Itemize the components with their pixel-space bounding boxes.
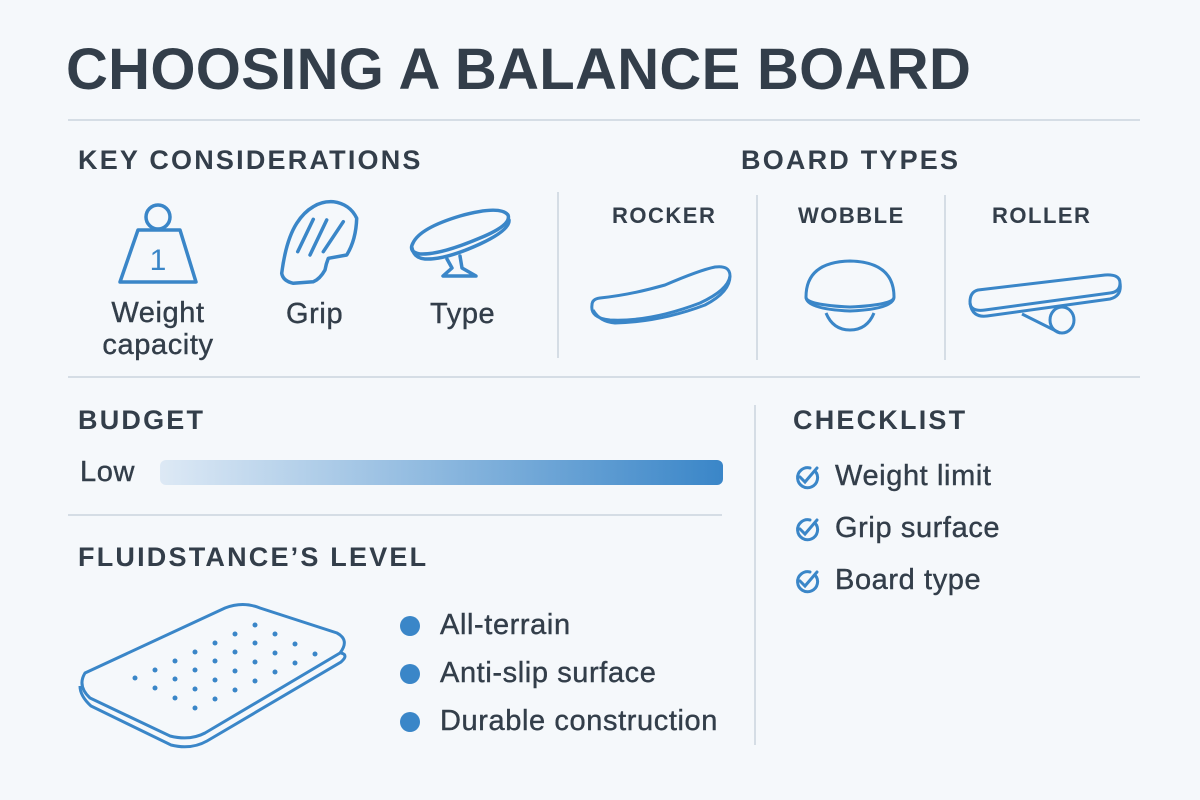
label: rocker: ROCKER [612,203,716,228]
label: wobble: WOBBLE [798,203,905,228]
icon: wobble [806,261,894,330]
label: roller: ROLLER [992,203,1091,228]
list: checklist items: Weight limit [835,460,992,492]
title: CHOOSING A BALANCE BOARD [66,37,971,102]
heading: fluidstance's level: FLUIDSTANCE’S LEVEL [78,542,428,572]
list: fluidstance features: Anti-slip surface [440,657,656,689]
bar: budget gradient [160,460,723,485]
label: weight capacity: capacity [102,329,214,361]
heading: board types: BOARD TYPES [741,145,960,175]
icon: type [412,210,509,276]
heading: key considerations: KEY CONSIDERATIONS [78,145,423,175]
icon: rocker [592,267,730,323]
list: fluidstance features: Durable construction [440,705,718,737]
icon: grip [282,202,357,283]
icons: board types [590,260,1122,334]
icon: weight [120,205,196,282]
icon: fluidstance board [78,603,346,748]
label: weight capacity [102,297,214,361]
panel: key considerations icons [102,200,511,361]
list: fluidstance features [400,609,718,737]
icon: weight: 1 [150,244,166,277]
label: low: Low [80,456,135,488]
heading: budget: BUDGET [78,405,205,435]
list: fluidstance features: All-terrain [440,609,571,641]
label: grip: Grip [286,298,343,330]
label: type: Type [430,298,495,330]
label: weight capacity: Weight [111,297,205,329]
icon: roller [970,275,1120,333]
list: checklist items [796,460,1000,596]
list: checklist items: Board type [835,564,981,596]
heading: checklist: CHECKLIST [793,405,967,435]
list: checklist items: Grip surface [835,512,1000,544]
